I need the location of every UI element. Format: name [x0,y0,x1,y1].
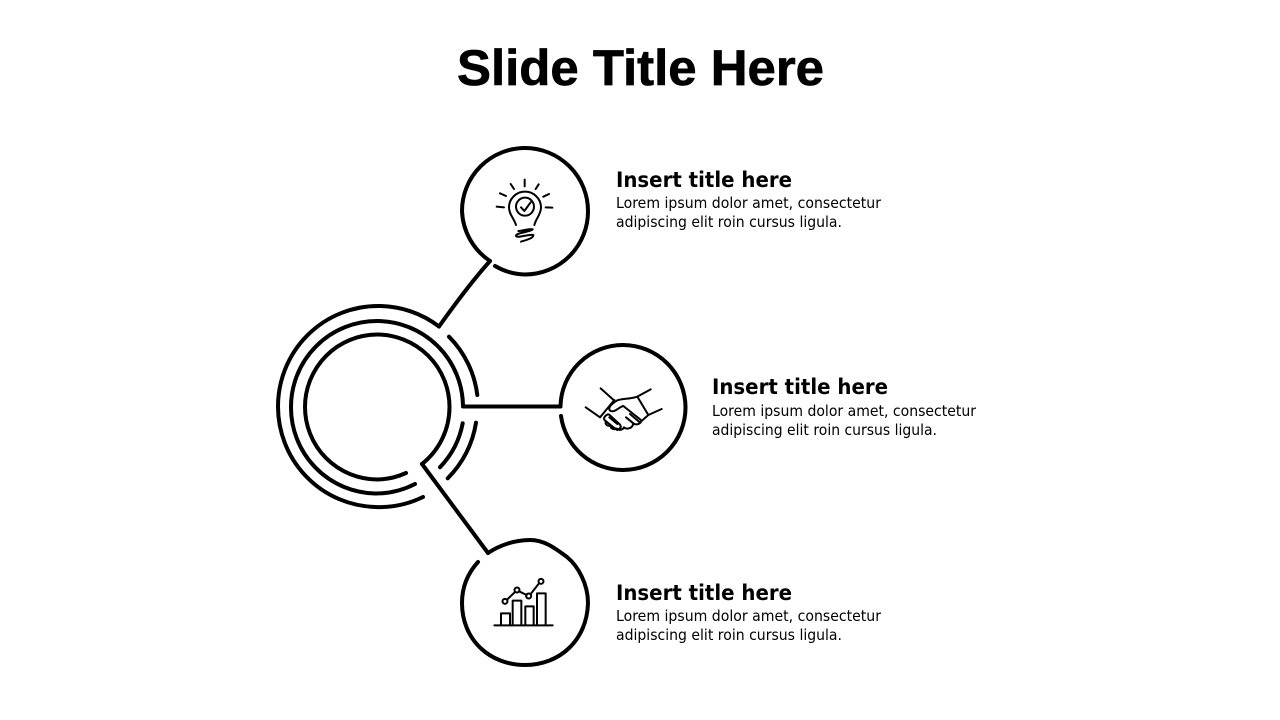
text block: middle item: Insert title here [712,375,888,399]
text block: bottom item [616,581,882,644]
text block: middle item: Lorem ipsum dolor amet, consectetur [712,402,977,420]
text block: bottom item: Insert title here [616,581,792,605]
connector: rings to top circle [439,261,490,326]
title: Slide Title Here [457,40,824,96]
circle: top node [462,148,588,274]
circle: middle node [560,345,686,470]
text block: top item: Lorem ipsum dolor amet, consectetur [616,194,882,212]
text block: middle item: adipiscing elit roin cursus ligula. [712,421,937,439]
central concentric rings [278,306,477,507]
text block: top item [616,168,882,231]
connector: rings to bottom circle [422,464,488,553]
text block: top item: adipiscing elit roin cursus ligula. [616,213,842,231]
text block: bottom item: adipiscing elit roin cursus ligula. [616,626,842,644]
icon: bar chart with trend line [494,579,553,625]
icon: handshake [586,388,662,430]
icon: light bulb with check [497,180,552,242]
text block: bottom item: Lorem ipsum dolor amet, consectetur [616,607,882,625]
text block: middle item [712,375,977,439]
text block: top item: Insert title here [616,168,792,192]
circle: bottom node [462,540,588,665]
connector: rings to middle circle [463,404,560,408]
